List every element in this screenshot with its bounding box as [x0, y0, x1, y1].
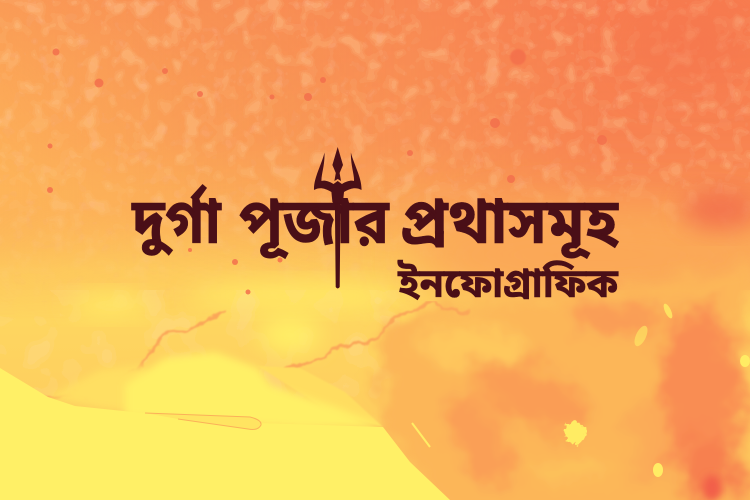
- capsule stain outline: [145, 413, 261, 430]
- tide line: darker stain edge: [46, 306, 470, 397]
- title: Durga Pujar Prothasamuho: পূজার: [239, 187, 390, 259]
- title: Durga Pujar Prothasamuho: [131, 183, 619, 259]
- title: Durga Pujar Prothasamuho: দুর্গা: [131, 183, 222, 257]
- yellow flat region, lower left: [0, 352, 450, 500]
- decorative red spots, upper area: [47, 48, 607, 294]
- trident: [314, 147, 362, 288]
- subtitle: Infographic: ইনফোগ্রাফিক: [397, 261, 618, 306]
- light splashes, lower right: [412, 302, 750, 477]
- title: Durga Pujar Prothasamuho: প্রথাসমূহ: [400, 187, 619, 259]
- lower right orange wash: [380, 270, 750, 500]
